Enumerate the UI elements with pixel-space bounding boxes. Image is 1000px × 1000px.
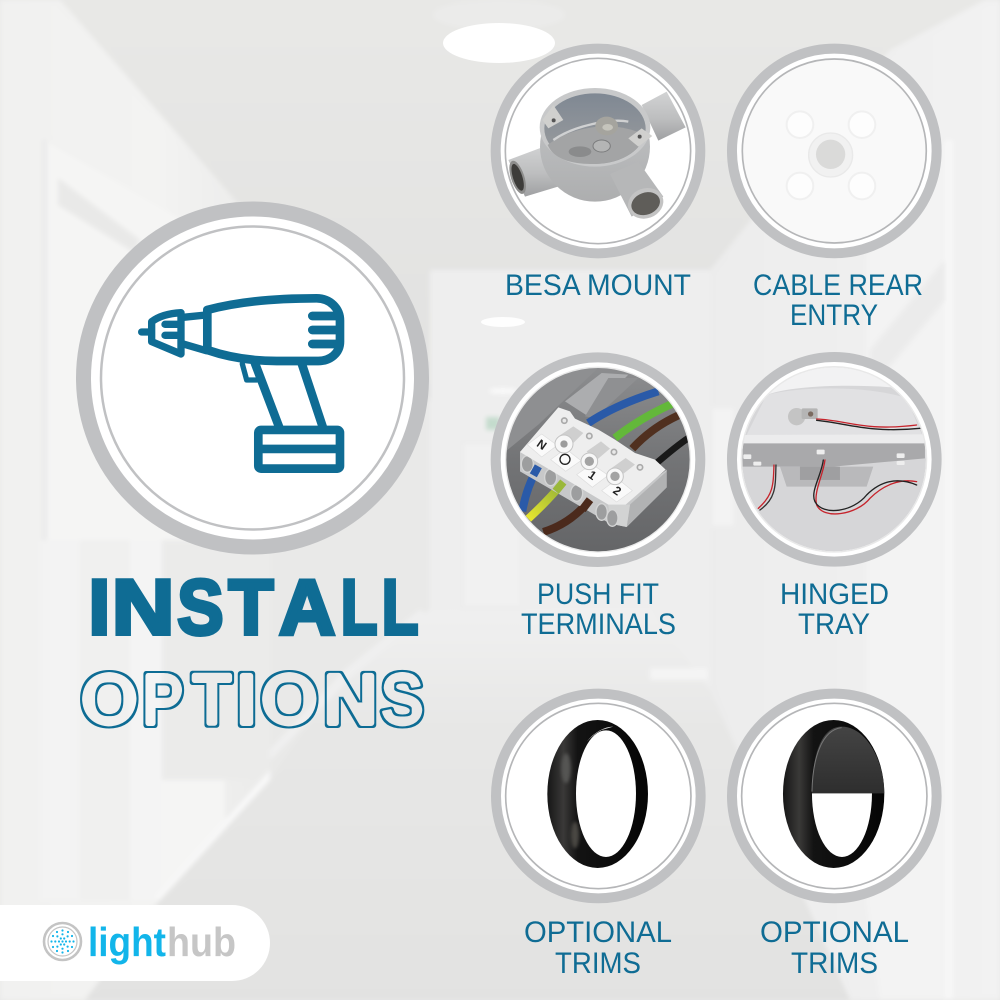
heading: INSTALL: L xyxy=(382,563,418,651)
icon: drill xyxy=(142,298,340,469)
image: terminal block circle: 2 xyxy=(610,483,624,499)
panel: optional trim ring xyxy=(496,694,701,980)
label: CABLE REAR ENTRY: ENTRY xyxy=(790,299,878,332)
image: terminal block circle xyxy=(496,357,700,562)
panel: optional eyelid trim xyxy=(732,694,937,980)
heading: OPTIONS: N xyxy=(323,658,378,741)
icon panel: drill in circle xyxy=(84,209,422,547)
image: hinged tray circle xyxy=(732,357,937,562)
logo: lighthub pill xyxy=(0,905,270,981)
heading: INSTALL: S xyxy=(177,563,224,651)
image: rear entry circle xyxy=(732,49,937,253)
heading: INSTALL: I xyxy=(88,563,110,651)
heading: INSTALL: N xyxy=(112,563,174,651)
heading: INSTALL: A xyxy=(279,563,335,651)
label: PUSH FIT TERMINALS xyxy=(521,578,676,641)
label: CABLE REAR ENTRY xyxy=(753,269,923,332)
panel: cable rear entry xyxy=(732,49,937,332)
image: besa mount circle xyxy=(496,49,700,253)
icon: lighthub mark xyxy=(44,923,81,960)
image: terminal block circle: 1 xyxy=(586,468,599,483)
image: black trim ring circle xyxy=(496,694,701,898)
heading: OPTIONS: O xyxy=(260,658,319,741)
heading: OPTIONS: S xyxy=(380,658,424,741)
wordmark: lighthub: hub xyxy=(167,919,236,965)
heading: INSTALL: T xyxy=(228,563,273,651)
label: OPTIONAL TRIMS: OPTIONAL xyxy=(524,916,672,949)
label: CABLE REAR ENTRY: CABLE REAR xyxy=(753,269,923,302)
heading: OPTIONS: P xyxy=(142,658,184,741)
heading: OPTIONS: I xyxy=(236,658,257,741)
wordmark: lighthub: light xyxy=(88,919,166,965)
label: PUSH FIT TERMINALS: TERMINALS xyxy=(521,608,676,641)
label: PUSH FIT TERMINALS: PUSH FIT xyxy=(537,578,659,611)
heading: OPTIONS: T xyxy=(192,658,232,741)
label: HINGED TRAY: TRAY xyxy=(798,608,870,641)
label: BESA MOUNT: BESA MOUNT xyxy=(505,269,691,302)
image: terminal block circle: N xyxy=(534,436,549,453)
panel: push fit terminals xyxy=(496,357,700,641)
label: OPTIONAL TRIMS xyxy=(760,916,909,980)
label: HINGED TRAY xyxy=(780,578,889,641)
heading: OPTIONS: O xyxy=(80,658,139,741)
panel: hinged tray xyxy=(732,357,937,641)
heading: INSTALL: L xyxy=(341,563,378,651)
label: OPTIONAL TRIMS: OPTIONAL xyxy=(760,916,909,949)
panel: besa mount xyxy=(496,49,700,302)
ceiling lamps xyxy=(443,23,555,327)
label: OPTIONAL TRIMS xyxy=(524,916,672,980)
label: OPTIONAL TRIMS: TRIMS xyxy=(791,947,878,980)
label: OPTIONAL TRIMS: TRIMS xyxy=(555,947,641,980)
label: HINGED TRAY: HINGED xyxy=(780,578,889,611)
image: black eyelid trim circle xyxy=(732,694,937,898)
